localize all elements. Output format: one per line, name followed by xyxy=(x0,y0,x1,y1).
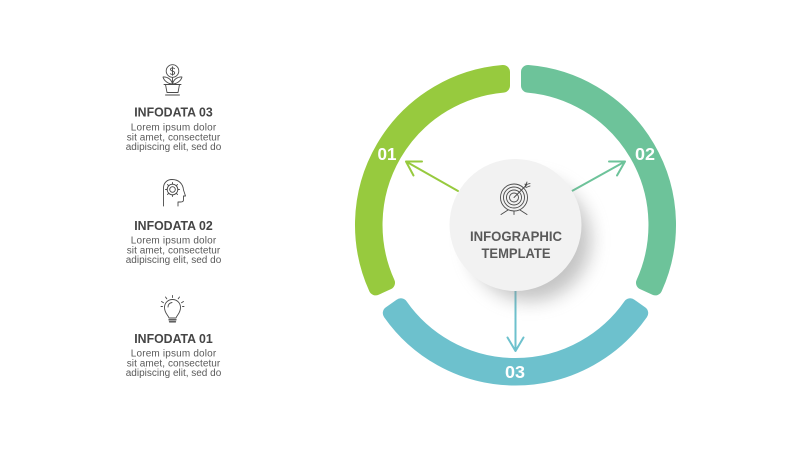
label: infodata 02: sit amet, consectetur xyxy=(127,245,221,256)
icon: head with gear xyxy=(164,180,186,206)
label: infodata 01: sit amet, consectetur xyxy=(127,358,221,369)
icon: target xyxy=(500,182,530,214)
ring segment 01: 01 xyxy=(378,144,397,164)
ring segment 03: 03 xyxy=(505,362,525,382)
arrow to segment 03 xyxy=(508,290,524,351)
label: infodata 02: adipiscing elit, sed do xyxy=(126,255,222,266)
label: infodata 02: INFODATA 02 xyxy=(134,219,213,233)
label: infodata 01: adipiscing elit, sed do xyxy=(126,368,222,379)
label: infodata 02: Lorem ipsum dolor xyxy=(131,236,217,246)
label: infodata 01 xyxy=(126,332,222,379)
label: infodata 03: INFODATA 03 xyxy=(134,106,213,120)
label: infodata 02 xyxy=(126,219,222,266)
label: infodata 01: Lorem ipsum dolor xyxy=(131,348,217,360)
central circle xyxy=(450,159,582,291)
arrow to segment 02 xyxy=(572,162,625,191)
central circle shadow xyxy=(469,179,591,301)
label: infodata 03: adipiscing elit, sed do xyxy=(126,142,222,153)
icon: light bulb xyxy=(161,296,184,322)
ring segment 02 xyxy=(528,72,669,288)
icon: plant with dollar coin xyxy=(163,65,182,95)
center title xyxy=(470,228,562,261)
ring segment 02: 02 xyxy=(635,144,655,164)
label: infodata 01: INFODATA 01 xyxy=(134,332,213,346)
ring segment 01 xyxy=(362,72,503,288)
arrow to segment 01 xyxy=(406,162,458,191)
label: infodata 03: Lorem ipsum dolor xyxy=(131,122,217,134)
center title: TEMPLATE xyxy=(482,245,550,261)
center title: INFOGRAPHIC xyxy=(470,228,562,244)
label: infodata 03 xyxy=(126,106,222,153)
label: infodata 03: sit amet, consectetur xyxy=(127,132,221,143)
ring segment 03 xyxy=(390,305,641,382)
